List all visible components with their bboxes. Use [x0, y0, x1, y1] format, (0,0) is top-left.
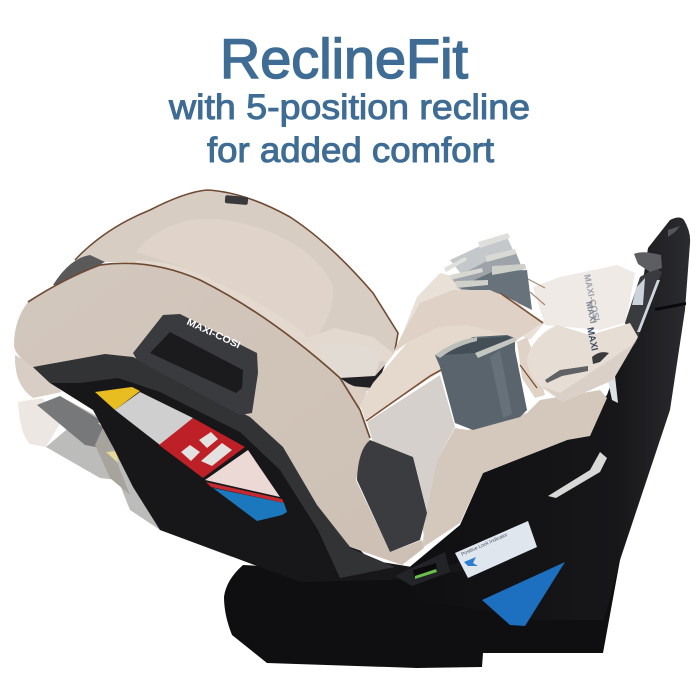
lower bolster — [360, 325, 520, 420]
handle body — [133, 314, 258, 415]
harness strap — [545, 366, 588, 383]
headrest logo clip — [225, 195, 248, 205]
ghost pad text 1: MAXI-COSI — [582, 273, 602, 322]
title — [168, 27, 530, 170]
red strip — [206, 482, 284, 503]
ghost cup holders — [444, 233, 532, 310]
ghost recline positions: left — [15, 355, 250, 557]
label arrow — [464, 557, 478, 566]
handle recess — [150, 332, 243, 393]
ghost piping — [528, 279, 545, 305]
carry handle — [133, 314, 258, 415]
green lock indicator — [395, 552, 450, 586]
subheading line 2: for added comfort — [207, 131, 494, 170]
light strip — [347, 383, 367, 408]
brand text: MAXI-COSI — [185, 317, 242, 351]
ghost fabric upper — [15, 355, 62, 398]
seat pad — [318, 343, 380, 380]
white section — [115, 392, 193, 445]
backrest shell — [400, 218, 690, 620]
blue base panel — [482, 562, 565, 626]
belt clip — [634, 252, 662, 272]
base — [224, 470, 640, 668]
indicator window — [413, 563, 437, 579]
lower pad — [133, 261, 393, 372]
ghost pad — [533, 265, 635, 330]
cup opening — [442, 336, 512, 355]
bolster right strip — [517, 337, 545, 398]
headrest fabric — [75, 190, 398, 394]
cup rim left — [435, 337, 477, 358]
bumper — [53, 255, 105, 285]
inner padding — [136, 219, 333, 340]
side foot block — [357, 440, 427, 552]
dark gap — [340, 365, 385, 388]
shell body — [400, 218, 690, 620]
ghost shell — [37, 396, 250, 557]
ghost back fabric — [393, 273, 545, 353]
red section — [159, 418, 245, 478]
cup body — [435, 335, 527, 430]
warning label — [95, 387, 287, 521]
blue section — [213, 488, 287, 521]
side piping — [28, 263, 370, 438]
front seat fabric — [422, 390, 607, 548]
cup detail — [490, 350, 512, 418]
seat shell — [33, 352, 607, 582]
harness buckle — [592, 352, 609, 364]
small white sliver — [608, 376, 618, 403]
bolster piping — [366, 293, 543, 421]
label card — [455, 521, 537, 578]
side panel — [14, 263, 424, 565]
shell slot — [668, 226, 680, 237]
pad rim — [542, 337, 638, 402]
ghost pad text 2: MAXI — [584, 300, 599, 324]
heading: ReclineFit: ReclineFit — [220, 27, 468, 90]
pad body — [527, 323, 638, 402]
yellow section — [95, 387, 140, 410]
ghost cup 3 — [457, 270, 532, 310]
cup holder — [435, 335, 527, 430]
ghost recline positions: headrest pad — [533, 265, 635, 330]
inner grey panel — [367, 375, 455, 545]
pad text: MAXI — [584, 326, 600, 352]
rear piping — [75, 190, 398, 350]
white section with red text — [205, 450, 280, 497]
belt strip — [625, 268, 662, 345]
label text: Positive Lock Indicator — [460, 532, 509, 558]
ghost cup 2 — [452, 250, 525, 300]
cup rim right — [475, 337, 517, 358]
ghost cup 1 — [450, 237, 520, 285]
rear back fabric — [53, 190, 398, 408]
side fabric — [14, 263, 424, 565]
shell top band — [33, 354, 395, 578]
shell lower body — [33, 352, 470, 582]
base label — [455, 521, 537, 578]
ghost yellow tab — [98, 421, 118, 463]
subheading line 1: with 5-position recline — [168, 88, 530, 127]
small seat label — [548, 452, 607, 498]
upper bolster — [393, 290, 542, 353]
ghost fabric lower — [18, 398, 62, 447]
headrest pad — [527, 323, 638, 402]
front bolsters — [360, 290, 545, 421]
